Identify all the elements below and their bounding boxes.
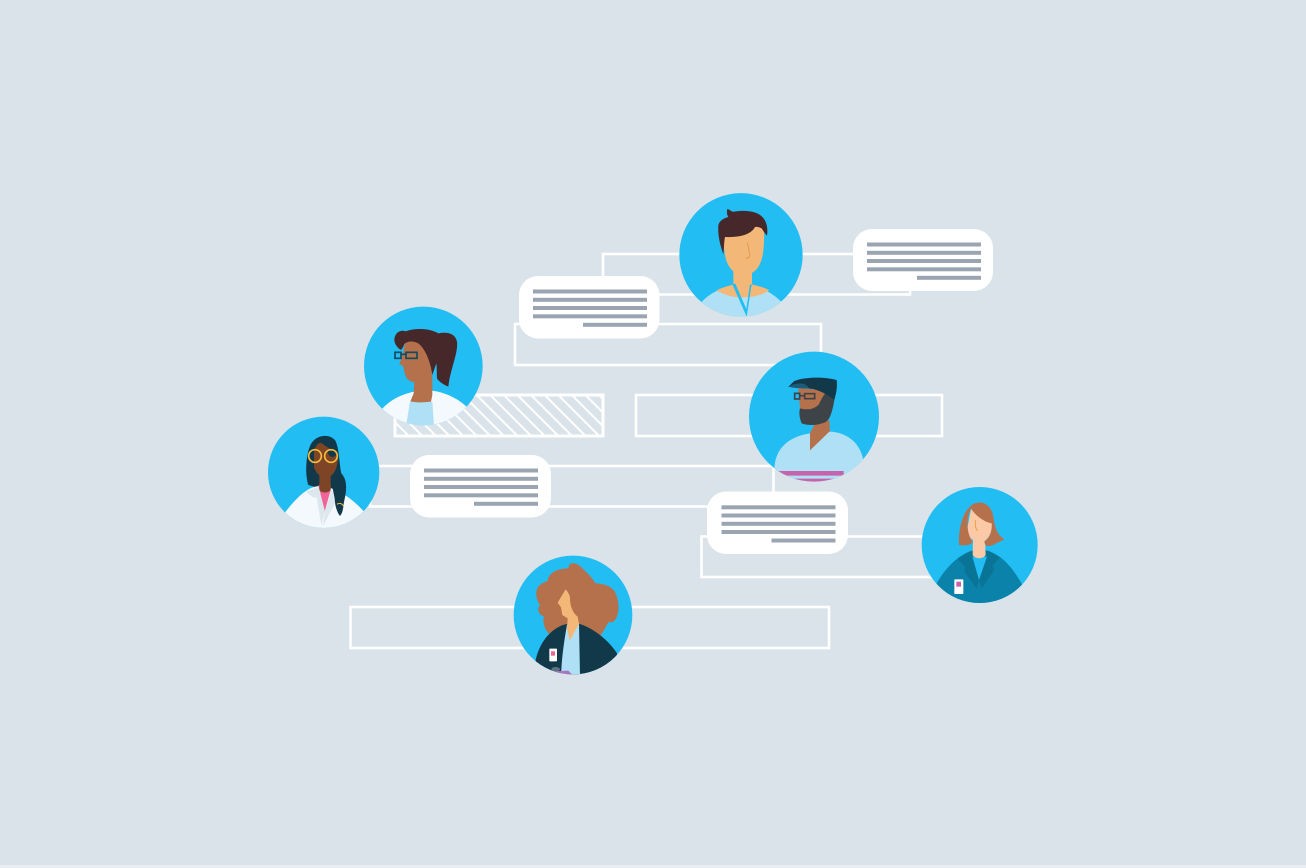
timeline bars xyxy=(350,254,942,648)
avatar: man with lanyard xyxy=(679,193,803,325)
speech bubble: lower right xyxy=(707,492,848,554)
speech bubble: left xyxy=(410,455,551,518)
avatar: woman with braid and yellow glasses xyxy=(268,417,379,530)
speech bubble: top right xyxy=(853,229,993,291)
speech bubble: upper centre xyxy=(519,276,660,338)
avatar: woman with ponytail and glasses xyxy=(364,307,483,430)
avatar: bearded man with cap xyxy=(749,352,879,487)
avatar: woman with auburn bob and teal jacket xyxy=(922,487,1038,608)
illustration: team members with timeline bars and speech bubbles xyxy=(0,193,1306,868)
avatar: woman with curly hair and dark jacket xyxy=(514,556,632,683)
